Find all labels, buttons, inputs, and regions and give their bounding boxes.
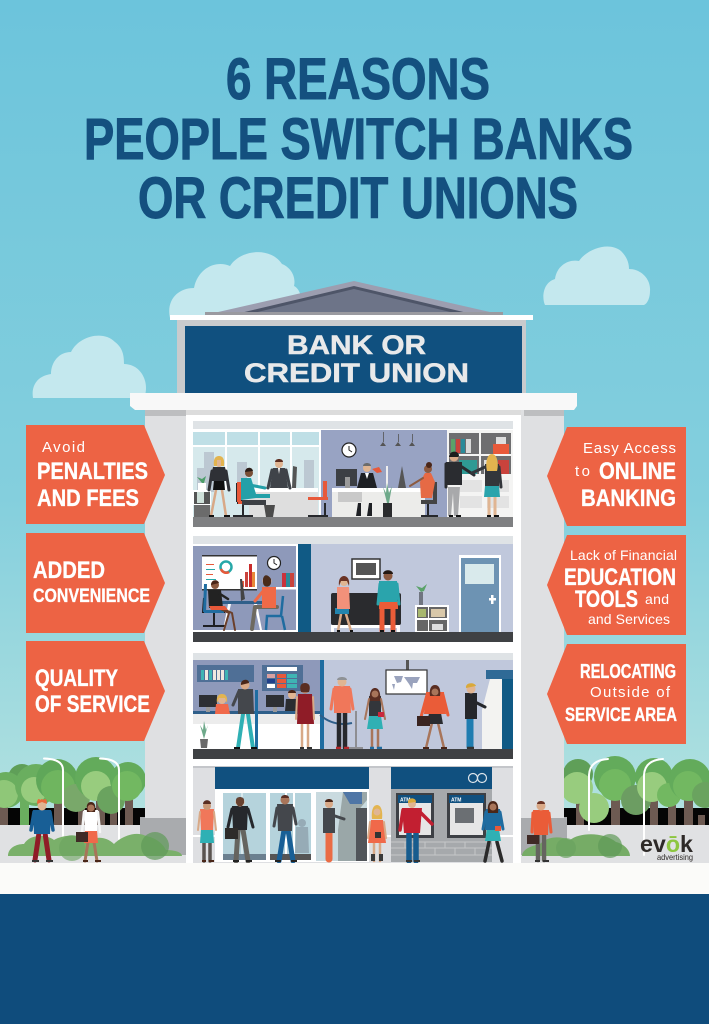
floor 2 pillar	[298, 544, 311, 632]
sign text: BANK OR	[287, 330, 426, 360]
pedestal right	[514, 817, 567, 855]
floor 2 meeting room	[193, 544, 298, 632]
cloud: left low	[33, 336, 146, 398]
cloud: right	[543, 246, 650, 305]
callout: added convenience	[26, 533, 165, 633]
cornice	[130, 393, 577, 415]
callout: financial education tools: EDUCATION	[564, 564, 676, 591]
callout: relocating	[547, 644, 686, 744]
pedestrian: woman with briefcase	[76, 802, 101, 861]
floor 1 slab	[193, 517, 513, 527]
pedestrian: man with briefcase	[527, 801, 551, 861]
ATM wall	[391, 767, 492, 862]
callout: online banking: to	[575, 463, 590, 480]
floor 1 chairs	[233, 481, 438, 516]
callout: online banking	[547, 427, 686, 526]
floor 2 lounge	[311, 544, 513, 632]
callout: penalties and fees: AND FEES	[37, 485, 139, 512]
pedestrian: man in blue sweater	[31, 799, 53, 861]
callout: financial education tools: and Services	[588, 611, 670, 627]
world map screen	[386, 660, 427, 694]
sign text: CREDIT UNION	[244, 358, 469, 388]
callout: penalties and fees: PENALTIES	[37, 458, 148, 485]
ground floor	[193, 766, 513, 863]
bushes right	[522, 834, 630, 858]
sidewalk	[0, 863, 709, 894]
callout: penalties and fees: Avoid	[42, 439, 85, 456]
sign text	[244, 330, 469, 388]
title: OR CREDIT UNIONS	[138, 166, 578, 231]
bushes left	[8, 832, 182, 861]
callout: relocating: Outside of	[590, 684, 671, 701]
floor 3	[193, 653, 513, 759]
wings	[145, 408, 564, 818]
evok logo: evōk	[640, 831, 693, 857]
cloud: behind roof	[169, 252, 305, 318]
title	[84, 47, 633, 231]
entrance doors	[215, 789, 369, 862]
trees right	[561, 756, 709, 826]
entrance sign	[215, 767, 369, 789]
trees left	[0, 757, 146, 826]
shelf unit	[415, 584, 449, 632]
callout: financial education tools: and	[645, 591, 669, 607]
sign panel	[177, 320, 526, 395]
callout: financial education tools	[547, 535, 686, 635]
pedestal left	[140, 817, 193, 855]
street lamps	[44, 758, 663, 855]
title: 6 REASONS	[226, 47, 490, 112]
callout: relocating: SERVICE AREA	[565, 705, 677, 726]
callout: penalties and fees	[26, 425, 165, 524]
sofa	[331, 593, 401, 632]
ATM machines: ATM	[400, 798, 410, 804]
callout: financial education tools: TOOLS	[575, 586, 638, 613]
callout: added convenience: ADDED	[33, 557, 105, 584]
ground floor people	[198, 795, 503, 861]
floor 3 lobby	[320, 660, 513, 749]
floor 1 people	[209, 452, 501, 516]
callout: online banking: Easy Access	[583, 440, 676, 457]
callout: online banking: ONLINE	[599, 458, 676, 485]
ATM machines: ATM	[451, 798, 461, 804]
floor 1 shelves	[447, 430, 513, 517]
floor 3 teller area	[193, 660, 321, 749]
pediment roof	[205, 281, 503, 316]
floor 1 window room	[193, 430, 321, 517]
floor 3 slab	[193, 749, 513, 759]
callout: relocating: RELOCATING	[580, 661, 676, 683]
ATM machines	[396, 793, 486, 838]
callout: quality of service	[26, 641, 165, 741]
ATM kiosk	[482, 670, 513, 749]
floor 1	[193, 421, 513, 527]
floor 2	[193, 536, 513, 642]
floor 1 office room	[321, 430, 447, 517]
bottom band	[0, 894, 709, 1024]
roof ledge	[170, 315, 533, 320]
callout: financial education tools: Lack of Financial	[570, 547, 677, 563]
exchange rate board	[262, 665, 303, 691]
callout: quality of service: QUALITY	[35, 665, 118, 692]
floor 1 desks	[249, 466, 425, 517]
door	[459, 555, 501, 632]
callout: added convenience: CONVENIENCE	[33, 586, 150, 607]
sidewalk wall	[0, 825, 709, 863]
evok logo: advertising	[657, 852, 693, 862]
floor 2 slab	[193, 632, 513, 642]
whiteboard chart	[202, 555, 257, 590]
floor 1 props	[193, 476, 392, 517]
building body	[186, 410, 521, 863]
callout: online banking: BANKING	[581, 485, 676, 512]
callout: quality of service: OF SERVICE	[35, 691, 150, 718]
